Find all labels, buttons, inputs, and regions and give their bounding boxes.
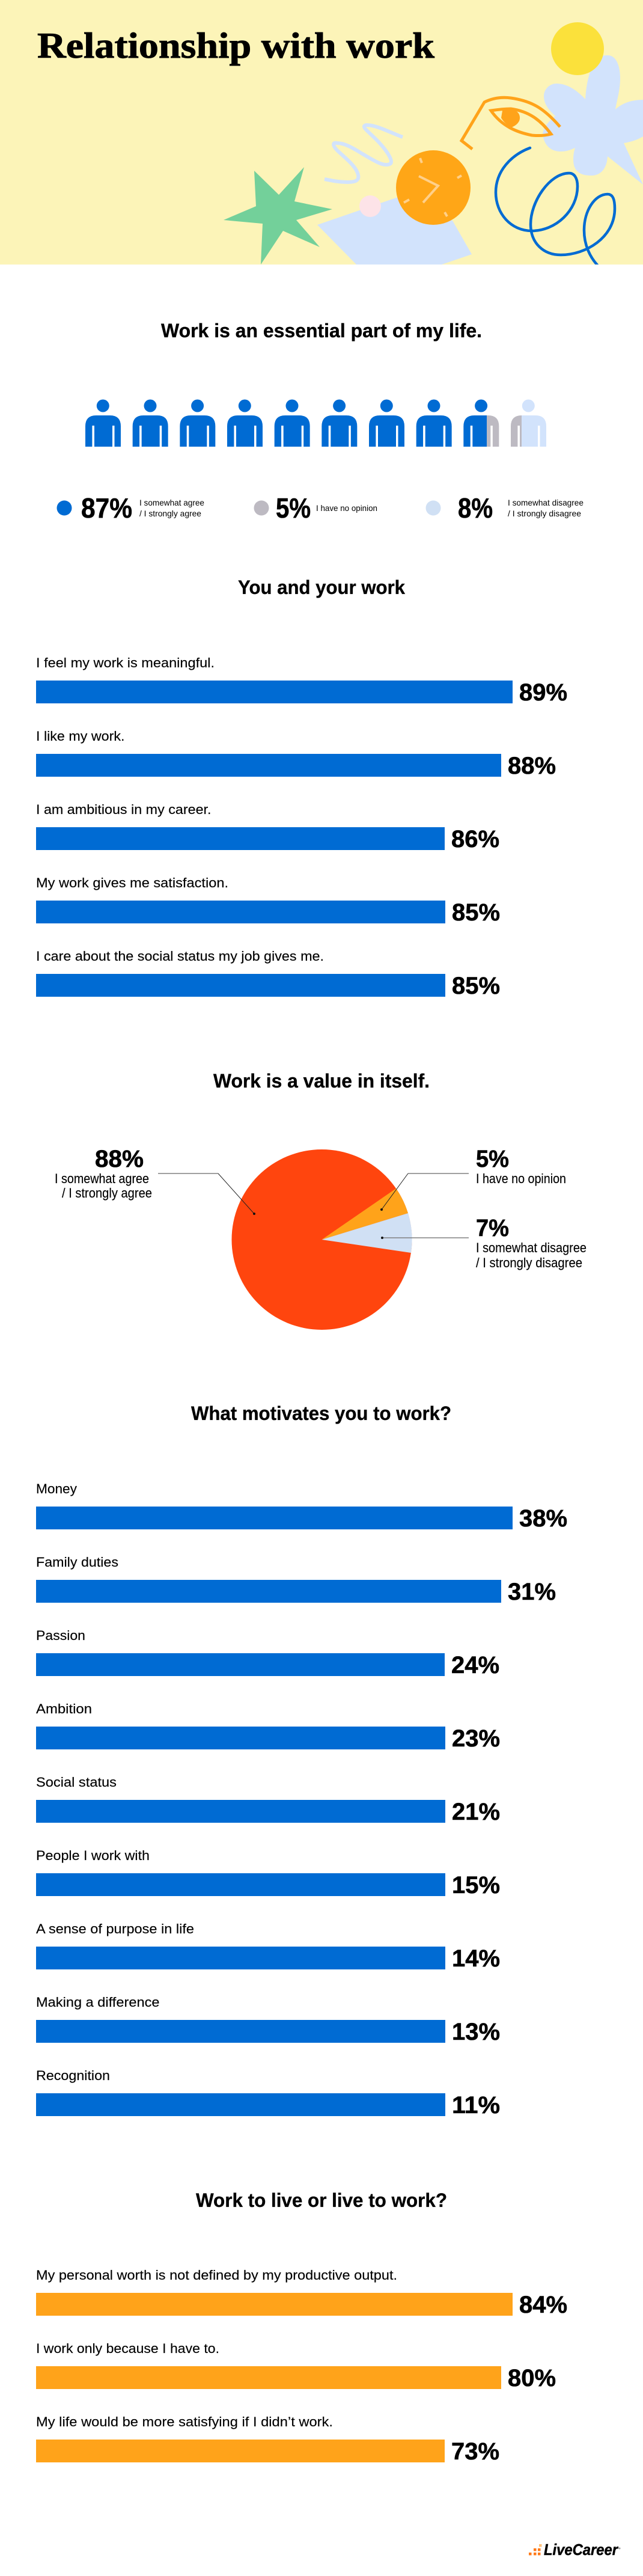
header banner — [0, 0, 643, 266]
bar: family 31%: Family duties — [36, 1555, 118, 1570]
bar: recognition 11%: 11% — [452, 2092, 500, 2119]
bar: social status 21% — [36, 1775, 500, 1825]
bar: recognition 11%: Recognition — [36, 2068, 110, 2083]
title: Relationship with work — [37, 26, 435, 66]
icon: clock — [396, 150, 471, 225]
legend: disagree: I somewhat disagree — [508, 498, 584, 507]
bar: people 15%: People I work with — [36, 1848, 150, 1863]
bar: family 31%: 31% — [508, 1579, 556, 1605]
bar: more satisfying 73%: My life would be more satisfying if I didn’t work. — [36, 2414, 333, 2429]
callout: 5%: I have no opinion — [476, 1171, 566, 1186]
bar: ambition 23% — [36, 1701, 500, 1752]
legend: disagree: / I strongly disagree — [508, 509, 581, 518]
panel: you and your work — [36, 577, 567, 999]
heading: Work is a value in itself. — [213, 1070, 430, 1092]
bar: more satisfying 73% — [36, 2414, 499, 2465]
bar: people 15%: 15% — [452, 1872, 500, 1898]
bar: money 38%: 38% — [519, 1505, 567, 1532]
callout: 5% — [380, 1146, 566, 1211]
icon: blue scribble — [496, 148, 615, 266]
icon: blue flower — [543, 55, 643, 185]
icon: blue polygon — [317, 197, 472, 265]
callout: 7%: / I strongly disagree — [476, 1255, 582, 1270]
bar: personal worth 84%: My personal worth is not defined by my productive output. — [36, 2268, 397, 2283]
heading: You and your work — [238, 577, 405, 598]
pie chart — [232, 1149, 412, 1330]
bar: ambitious 86%: 86% — [451, 826, 499, 852]
bar: have to 80%: I work only because I have to. — [36, 2341, 219, 2356]
bar: like 88%: I like my work. — [36, 729, 125, 744]
bar: satisfaction 85% — [36, 875, 500, 926]
legend: disagree: 8% — [458, 492, 493, 524]
legend: agree: / I strongly agree — [139, 509, 201, 518]
icon: light blue squiggle — [325, 125, 403, 182]
legend: agree: I somewhat agree — [139, 498, 204, 507]
legend: disagree — [425, 492, 584, 524]
panel: what motivates you — [36, 1403, 567, 2119]
legend: no opinion: 5% — [276, 492, 311, 524]
bar: family 31% — [36, 1555, 556, 1605]
bar: difference 13% — [36, 1995, 500, 2045]
icon: face line with eye — [462, 97, 560, 149]
icon: pink dot — [359, 195, 381, 217]
bar: personal worth 84%: 84% — [519, 2292, 567, 2318]
bar: like 88% — [36, 729, 556, 779]
legend: no opinion — [254, 492, 377, 524]
bar: more satisfying 73%: 73% — [451, 2438, 499, 2465]
bar: purpose 14% — [36, 1921, 500, 1972]
bar: social status 85%: 85% — [452, 973, 500, 999]
bar: purpose 14%: 14% — [452, 1945, 500, 1972]
pictogram: ten people — [85, 399, 546, 447]
bar: personal worth 84% — [36, 2268, 567, 2318]
panel: work is essential — [56, 320, 584, 524]
illustration: abstract shapes — [224, 22, 643, 266]
bar: ambitious 86%: I am ambitious in my career. — [36, 802, 212, 817]
callout: 88%: I somewhat agree — [55, 1171, 149, 1186]
bar: passion 24%: 24% — [451, 1652, 499, 1678]
bar: money 38%: Money — [36, 1481, 77, 1496]
panel: work to live — [36, 2189, 567, 2465]
logo: LiveCareer: LiveCareer — [544, 2541, 619, 2559]
heading: Work to live or live to work? — [196, 2189, 447, 2211]
bar: difference 13%: 13% — [452, 2019, 500, 2045]
callout: 7%: 7% — [476, 1215, 509, 1241]
heading: What motivates you to work? — [191, 1403, 451, 1424]
bar: difference 13%: Making a difference — [36, 1995, 160, 2010]
bar: people 15% — [36, 1848, 500, 1898]
bar: passion 24%: Passion — [36, 1628, 85, 1643]
legend: agree — [56, 492, 204, 524]
bar: ambition 23%: Ambition — [36, 1701, 92, 1716]
bar: satisfaction 85%: 85% — [452, 899, 500, 926]
callout: 88%: 88% — [95, 1146, 144, 1172]
bar: recognition 11% — [36, 2068, 500, 2119]
legend: agree: 87% — [81, 492, 132, 524]
bar: have to 80%: 80% — [508, 2365, 556, 2391]
bar: social status 85% — [36, 949, 500, 999]
bar: have to 80% — [36, 2341, 556, 2391]
callout: 7%: I somewhat disagree — [476, 1240, 587, 1255]
bar: social status 85%: I care about the social status my job gives me. — [36, 949, 324, 964]
heading: Work is an essential part of my life. — [161, 320, 482, 341]
bar: passion 24% — [36, 1628, 499, 1678]
bar: meaningful 89%: I feel my work is meaningful. — [36, 655, 215, 670]
panel: work is a value — [55, 1070, 587, 1330]
bar: ambition 23%: 23% — [452, 1725, 500, 1752]
bar: meaningful 89%: 89% — [519, 679, 567, 706]
callout: 88%: / I strongly agree — [62, 1186, 152, 1201]
bar: social status 21%: Social status — [36, 1775, 117, 1790]
bar: purpose 14%: A sense of purpose in life — [36, 1921, 194, 1936]
bar: ambitious 86% — [36, 802, 499, 852]
icon: yellow sun — [551, 22, 604, 75]
callout: 88% — [55, 1146, 255, 1215]
bar: satisfaction 85%: My work gives me satisfaction. — [36, 875, 228, 890]
callout: 7% — [381, 1215, 587, 1270]
bar: like 88%: 88% — [508, 753, 556, 779]
bar: money 38% — [36, 1481, 567, 1532]
legend: no opinion: I have no opinion — [316, 503, 377, 513]
bar: social status 21%: 21% — [452, 1799, 500, 1825]
callout: 5%: 5% — [476, 1146, 509, 1172]
bar: meaningful 89% — [36, 655, 567, 706]
icon: green star — [224, 167, 332, 265]
